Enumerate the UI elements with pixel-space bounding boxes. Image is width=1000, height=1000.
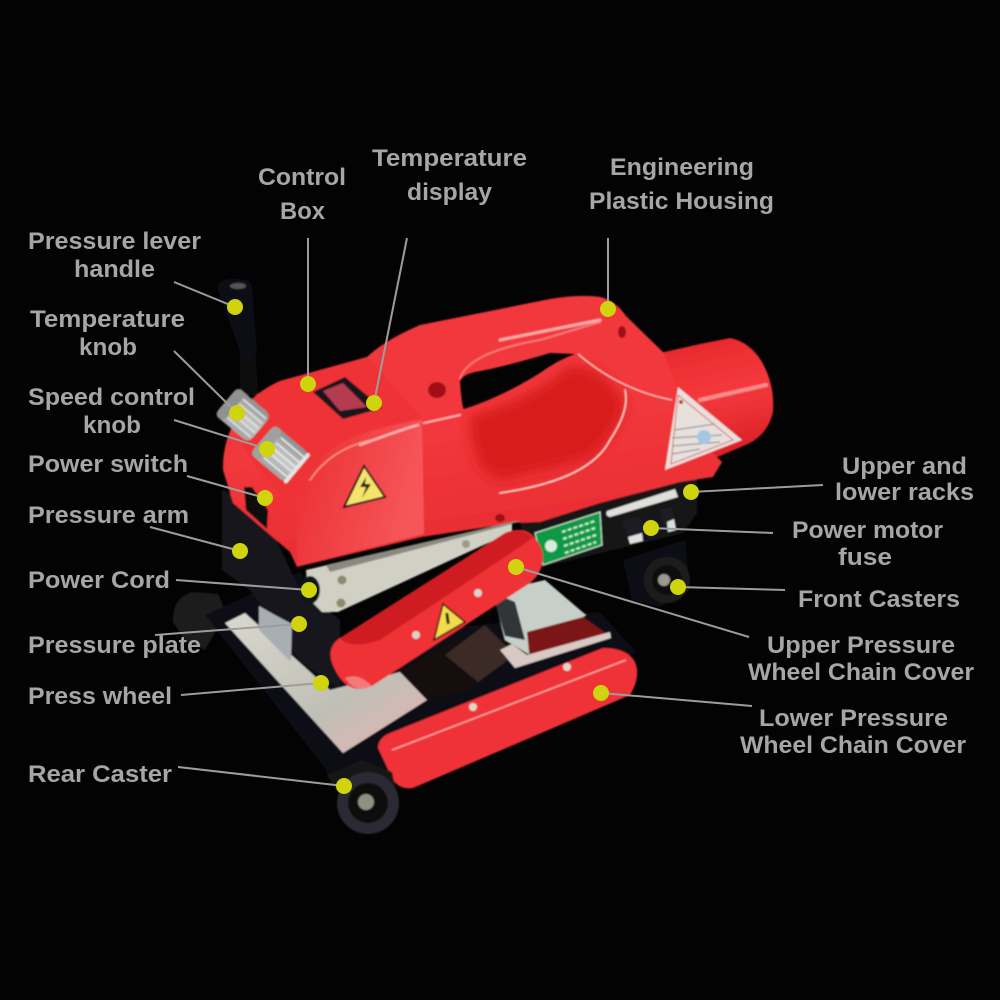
callout: pressure arm: Pressure arm <box>28 502 189 529</box>
callout: control box: Control <box>258 164 346 191</box>
callout: press wheel <box>28 675 329 710</box>
callout: temperature display: Temperature <box>372 145 527 172</box>
warning triangle: electrical <box>344 466 385 507</box>
switch plate <box>606 489 678 517</box>
callout: upper and lower racks: lower racks <box>835 479 974 506</box>
barrel <box>660 338 773 470</box>
callout: power motor fuse: fuse <box>838 544 892 571</box>
callout: upper and lower racks <box>683 453 974 506</box>
callout: front casters: Front Casters <box>798 586 960 613</box>
power cord socket <box>300 576 320 604</box>
callout: upper pressure wheel chain cover <box>508 559 974 686</box>
black chassis <box>520 478 697 567</box>
callout: lower pressure wheel chain cover: Lower Pressure <box>759 705 948 732</box>
rear frame and left knob <box>173 490 636 795</box>
handle recess shading <box>470 365 625 480</box>
callout: engineering plastic housing: Engineering <box>610 154 754 181</box>
callout: power motor fuse <box>643 517 943 571</box>
housing body with handle <box>223 296 722 567</box>
callout: control box: Box <box>280 198 326 225</box>
housing highlights <box>310 320 766 493</box>
callout: power motor fuse: Power motor <box>792 517 943 544</box>
callout: upper and lower racks: Upper and <box>842 453 967 480</box>
callout: engineering plastic housing <box>589 154 774 317</box>
callout: rear caster: Rear Caster <box>28 761 172 788</box>
handle holes <box>428 326 626 522</box>
callout: control box <box>258 164 346 392</box>
display <box>313 377 382 419</box>
lower chain cover <box>378 648 637 788</box>
callout: lower pressure wheel chain cover <box>593 685 966 759</box>
front caster <box>623 540 690 607</box>
front control box shade <box>296 420 424 566</box>
hanging warning tag <box>665 387 742 470</box>
tag cord <box>578 354 672 400</box>
callout: temperature knob: Temperature <box>30 306 185 333</box>
callout: speed control knob: Speed control <box>28 384 195 411</box>
callout: power switch <box>28 451 273 506</box>
rear caster <box>327 760 399 834</box>
callout: upper pressure wheel chain cover: Upper Pressure <box>767 632 955 659</box>
callout: temperature knob: knob <box>79 334 137 361</box>
silver base plate <box>225 613 427 753</box>
green product label <box>535 512 602 565</box>
callout: pressure lever handle <box>28 228 243 315</box>
welding machine illustration <box>173 279 773 834</box>
callout: front casters <box>670 579 960 613</box>
icon: pressure lever handle <box>217 279 258 395</box>
top panel highlight <box>240 357 422 505</box>
warning triangle: caution <box>434 604 465 640</box>
callout: engineering plastic housing: Plastic Housing <box>589 188 774 215</box>
callout: pressure arm <box>28 502 248 559</box>
callout: rear caster <box>28 761 352 794</box>
switch <box>244 487 268 529</box>
inner mechanism <box>400 580 611 700</box>
data sticker <box>259 606 292 662</box>
callout: temperature knob <box>30 306 245 421</box>
callout: lower pressure wheel chain cover: Wheel Chain Cover <box>740 732 966 759</box>
speed knob <box>250 425 311 484</box>
callout: temperature display <box>366 145 527 411</box>
callout: pressure lever handle: Pressure lever <box>28 228 201 255</box>
callout: speed control knob: knob <box>83 412 141 439</box>
silver pressure arm <box>306 520 520 612</box>
callout: upper pressure wheel chain cover: Wheel Chain Cover <box>748 659 974 686</box>
callout: pressure plate: Pressure plate <box>28 632 201 659</box>
callout: power cord: Power Cord <box>28 567 170 594</box>
callout: temperature display: display <box>407 179 493 206</box>
callout: press wheel: Press wheel <box>28 683 172 710</box>
upper chain cover <box>330 530 543 689</box>
switch plugs <box>622 507 676 544</box>
callout: pressure plate <box>28 616 307 659</box>
callout: power cord <box>28 567 317 598</box>
callout: pressure lever handle: handle <box>74 256 155 283</box>
callout: speed control knob <box>28 384 275 457</box>
temperature knob <box>215 387 271 443</box>
callout: power switch: Power switch <box>28 451 188 478</box>
